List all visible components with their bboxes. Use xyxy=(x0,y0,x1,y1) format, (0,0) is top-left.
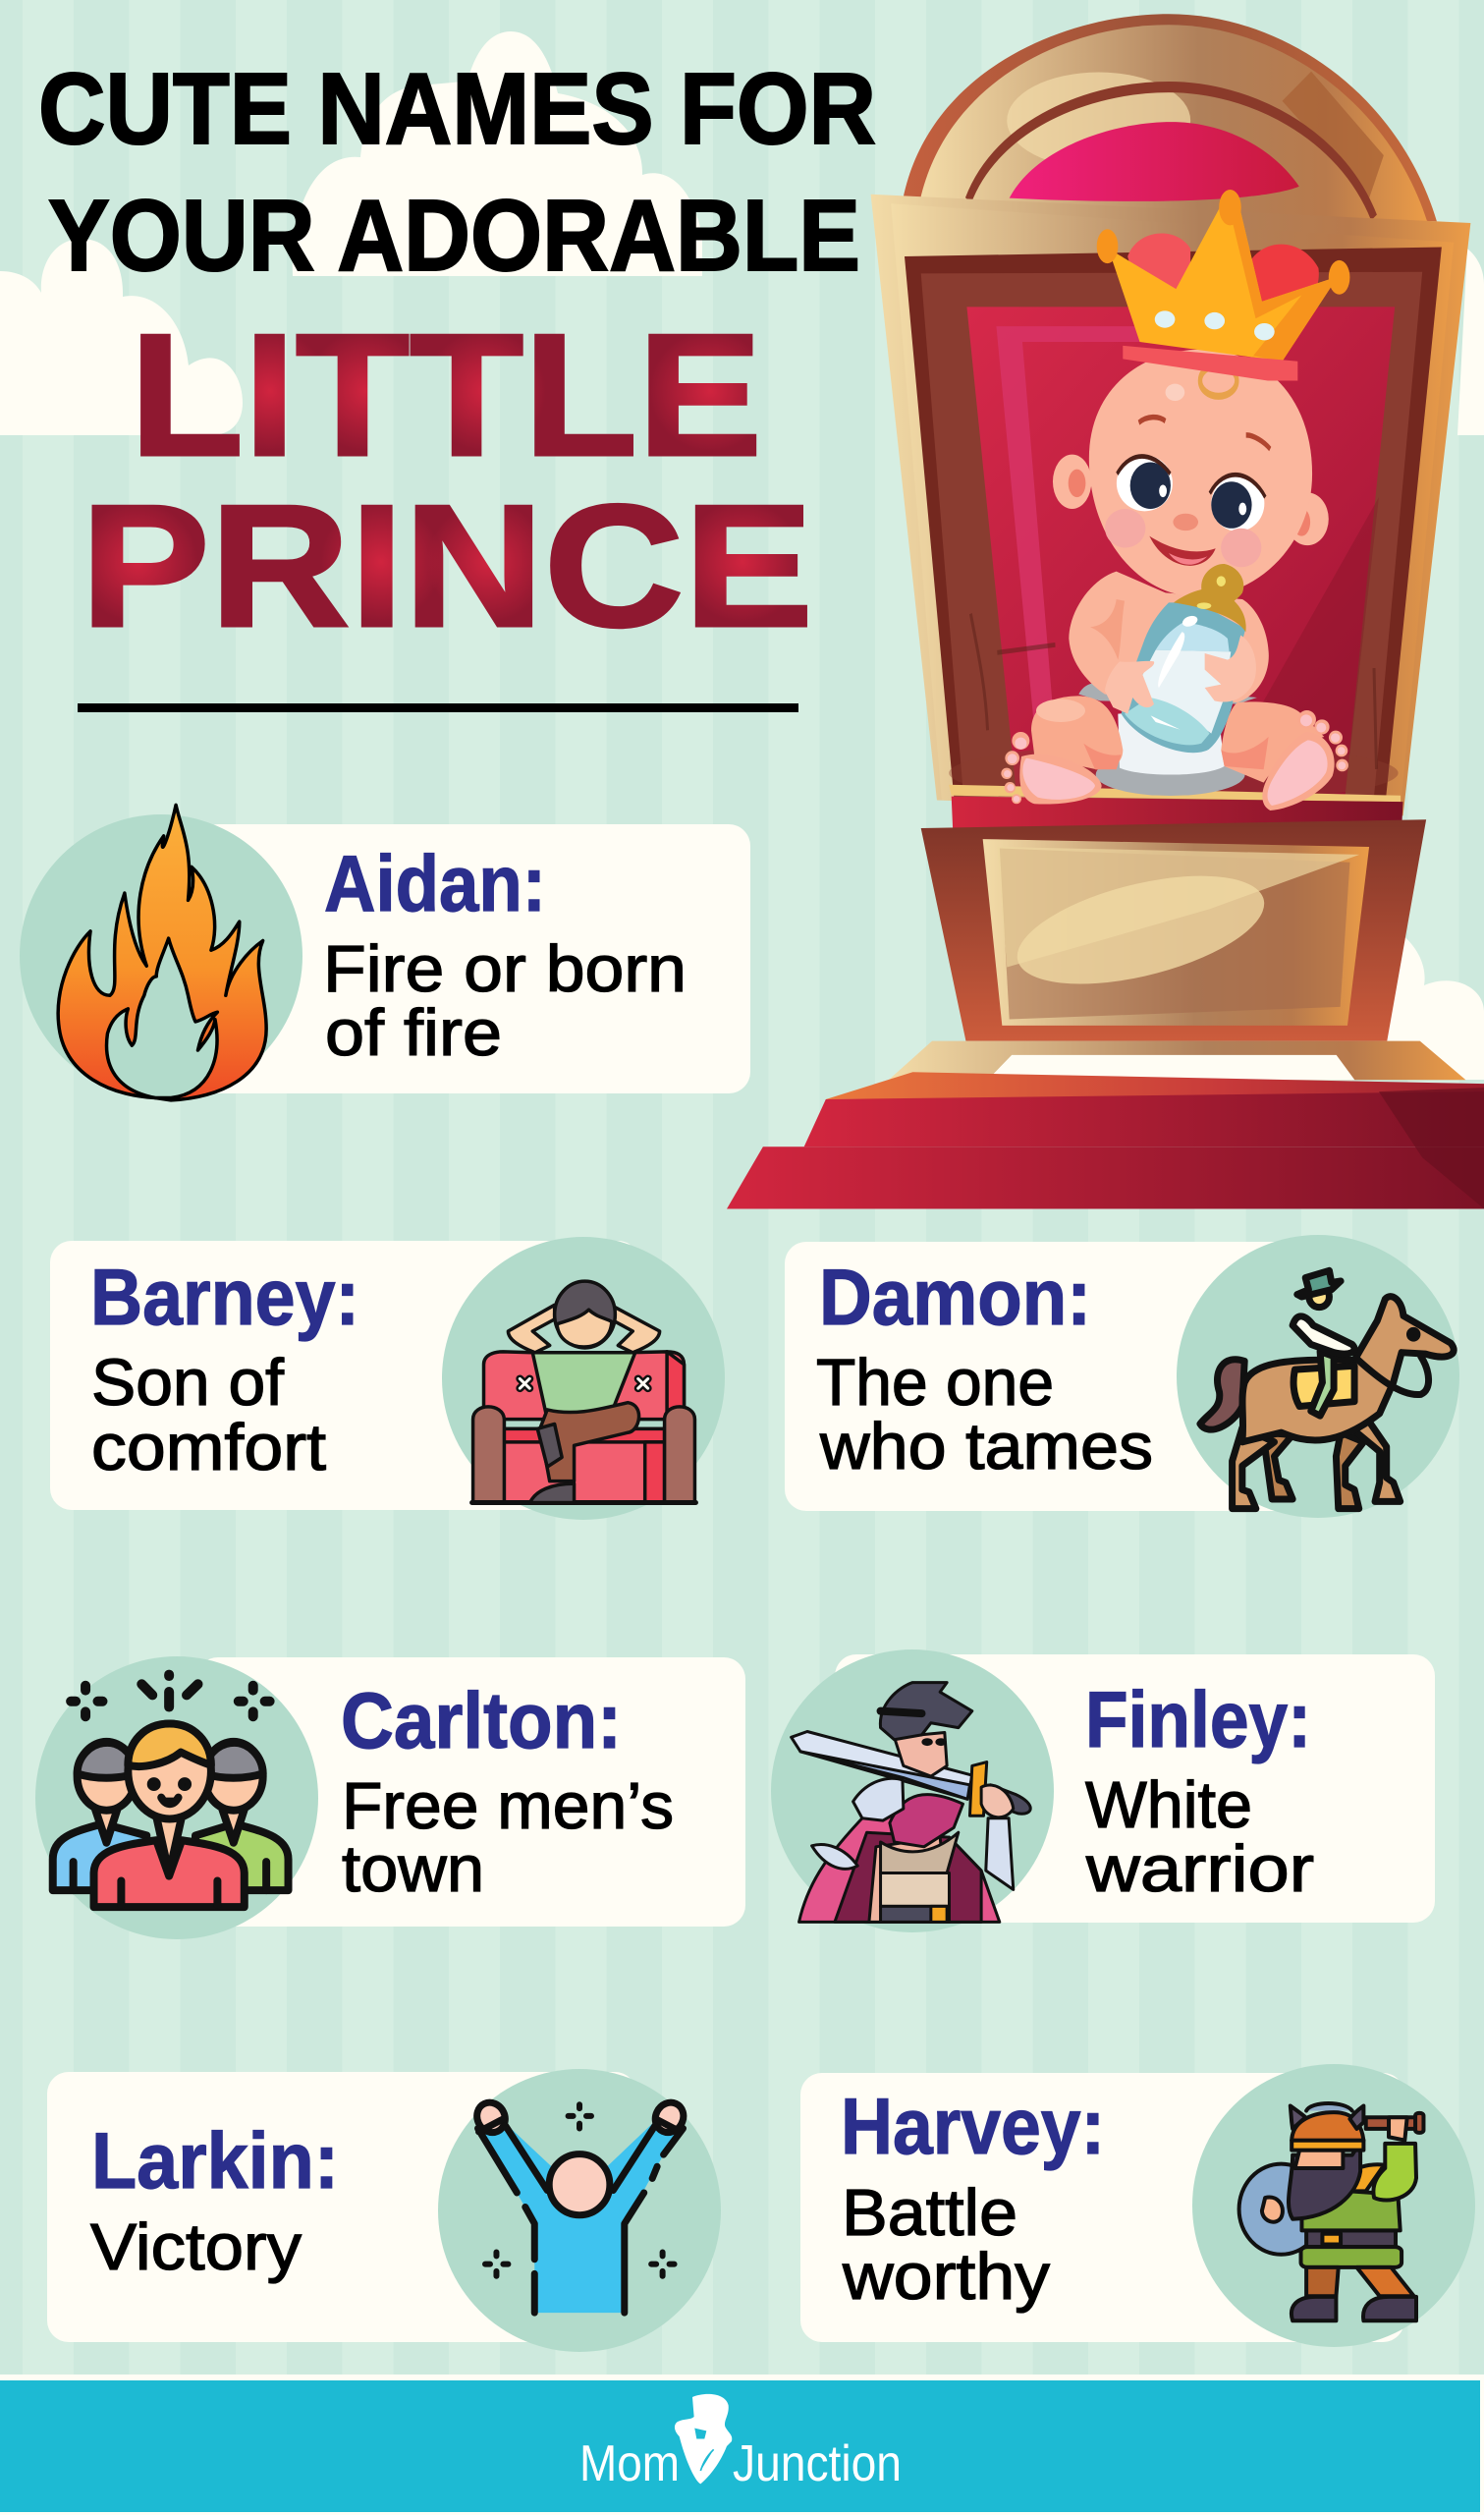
crown xyxy=(1097,190,1349,380)
meaning: Carlton: Free men’s xyxy=(342,1769,674,1843)
panel: Larkin xyxy=(47,2069,721,2352)
title: little prince: LITTLE xyxy=(130,298,762,492)
meaning: Barney: comfort xyxy=(91,1411,326,1484)
meaning: Larkin: Victory xyxy=(90,2210,302,2284)
name: Larkin: Larkin: xyxy=(91,2117,339,2206)
meaning: Aidan: of fire xyxy=(325,996,502,1070)
footer band xyxy=(0,2375,1484,2515)
icon circle: Damon xyxy=(1177,1235,1459,1518)
cloud: top centre xyxy=(293,31,702,276)
meaning: Aidan xyxy=(323,932,687,1070)
cloud: left xyxy=(0,239,243,435)
logo: MomJunction xyxy=(579,2394,902,2492)
meaning: Finley: warrior xyxy=(1085,1832,1314,1906)
meaning: Carlton xyxy=(342,1769,674,1906)
icon circle: Carlton xyxy=(35,1656,318,1939)
logo: MomJunction: Junction xyxy=(733,2435,902,2492)
icon circle: Finley xyxy=(771,1649,1054,1932)
meaning: Finley xyxy=(1085,1768,1314,1906)
title: little prince: PRINCE xyxy=(81,469,813,663)
feeding bottle, hands and legs xyxy=(1001,564,1348,810)
cloud: right upper xyxy=(1457,249,1484,435)
icon: horse rider xyxy=(1200,1270,1454,1509)
icon circle: Barney xyxy=(442,1237,725,1520)
icon circle: Larkin xyxy=(438,2069,721,2352)
meaning: Barney xyxy=(91,1346,326,1484)
panel: Barney xyxy=(50,1237,725,1520)
icon: person cheering xyxy=(472,2098,688,2313)
panel: Finley xyxy=(771,1649,1435,1932)
meaning: Harvey xyxy=(842,2176,1051,2314)
meaning: Harvey: Battle xyxy=(842,2176,1017,2250)
title: little prince xyxy=(81,298,813,663)
meaning: Damon xyxy=(816,1346,1153,1483)
icon: group of people xyxy=(53,1675,289,1907)
cloud: right lower xyxy=(1375,932,1484,1080)
meaning: Aidan: Fire or born xyxy=(323,932,687,1006)
icon circle: Aidan xyxy=(20,814,302,1097)
icon: warrior with sword xyxy=(792,1683,1030,1922)
icon: flame xyxy=(58,805,266,1100)
meaning: Harvey: worthy xyxy=(842,2240,1051,2314)
throne seat and lower panel xyxy=(921,785,1426,1041)
logo: MomJunction: Mom xyxy=(579,2435,680,2492)
title: cute names xyxy=(38,52,876,292)
name: Harvey: Harvey: xyxy=(841,2083,1105,2171)
icon: man relaxing in armchair xyxy=(472,1281,695,1502)
meaning: Finley: White xyxy=(1085,1768,1252,1842)
title: cute names: CUTE NAMES FOR xyxy=(38,52,876,165)
meaning: Damon: The one xyxy=(816,1346,1054,1420)
icon circle: Harvey xyxy=(1192,2064,1475,2347)
throne base and steps xyxy=(727,1041,1484,1208)
name: Carlton: Carlton: xyxy=(341,1677,622,1765)
name: Barney: Barney: xyxy=(90,1254,359,1342)
illustration: baby prince on throne xyxy=(727,14,1484,1208)
title: cute names: YOUR ADORABLE xyxy=(48,179,860,292)
name: Aidan: Aidan: xyxy=(324,840,546,928)
panel: Harvey xyxy=(800,2064,1475,2347)
baby body xyxy=(1069,572,1269,796)
throne arch xyxy=(904,14,1437,221)
name: Damon: Damon: xyxy=(819,1254,1091,1342)
meaning: Damon: who tames xyxy=(819,1410,1153,1483)
panel: Carlton xyxy=(35,1656,745,1939)
title divider xyxy=(78,703,798,712)
meaning: Barney: Son of xyxy=(91,1346,284,1420)
throne back panel xyxy=(871,195,1470,815)
panel: Damon xyxy=(785,1235,1459,1518)
panel: Aidan xyxy=(20,805,750,1100)
icon: viking with spyglass xyxy=(1239,2103,1423,2320)
meaning: Carlton: town xyxy=(342,1832,484,1906)
baby head xyxy=(1053,350,1329,596)
name: Finley: Finley: xyxy=(1085,1676,1311,1764)
